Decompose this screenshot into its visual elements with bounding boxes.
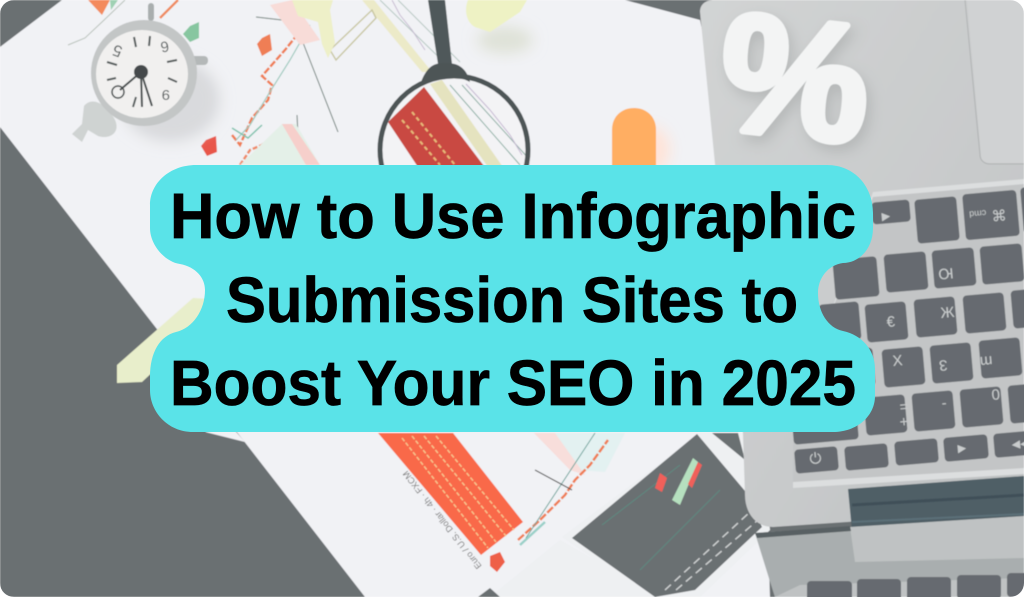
sheet of paper with trading charts (0, 0, 770, 597)
touchpad (965, 0, 1024, 164)
title text: Submission Sites to (226, 264, 798, 336)
keyboard keys (792, 184, 1024, 474)
lower paper text: Euro / U.S. Dollar · 4h · FXCM (401, 469, 484, 571)
banner shape (150, 165, 875, 432)
key legends: ⏻ (809, 450, 822, 468)
pink and green chart highlights (270, 0, 320, 45)
title text: Boost Your SEO in 2025 (170, 347, 856, 419)
key legends: 3 (938, 356, 948, 374)
alarm clock: 9 (162, 86, 170, 103)
title text (170, 180, 856, 419)
screen reflection (848, 476, 1024, 527)
key legends: € (886, 313, 896, 331)
key legends: m (979, 352, 993, 370)
key legends: = (899, 398, 909, 416)
key legends: - (941, 395, 947, 412)
laptop (700, 0, 1024, 562)
second laptop (755, 516, 1024, 597)
keyboard recess (793, 179, 1024, 488)
purple line chart (380, 0, 460, 70)
yellow highlighter (292, 0, 335, 58)
house icons (183, 22, 199, 42)
key legends (809, 205, 1024, 468)
lower house icon (490, 552, 505, 572)
magnifying glass (377, 0, 531, 165)
clock ticks (107, 36, 177, 107)
dark corner under sheet (478, 588, 500, 597)
alarm clock: 6 (159, 37, 170, 55)
top left chart (68, 0, 338, 165)
clock knobs (148, 3, 154, 21)
key legends: ▶ (957, 442, 967, 455)
second highlighter (466, 0, 533, 54)
sticky note (116, 298, 204, 384)
lower highlight zones (556, 433, 624, 472)
alarm clock (72, 3, 220, 142)
orange highlighter (612, 108, 670, 174)
key legends: ⌘ (991, 205, 1007, 223)
key legends: Ж (940, 304, 955, 322)
clock digits: 5 (110, 41, 125, 60)
lens contents (388, 80, 530, 170)
key legends: + (899, 413, 909, 431)
dark chart panel (562, 433, 770, 597)
clock bell (72, 102, 117, 142)
key legends: 0 (991, 386, 1001, 404)
lower keys (807, 573, 1024, 597)
orange label top (88, 0, 110, 15)
title banner (150, 165, 875, 432)
second sheet (490, 540, 660, 597)
key legends: X (892, 352, 903, 370)
lower red notice block (378, 433, 523, 555)
notice text lines (402, 436, 514, 548)
chart panel labels (665, 512, 758, 590)
key legends: cmd (969, 208, 987, 219)
key legends: Ю (938, 264, 954, 282)
beige stripes (362, 0, 432, 72)
title text: How to Use Infographic (170, 180, 856, 252)
lower candles (518, 433, 608, 545)
clock hands (112, 72, 152, 107)
key legends: ▶ (881, 210, 891, 223)
